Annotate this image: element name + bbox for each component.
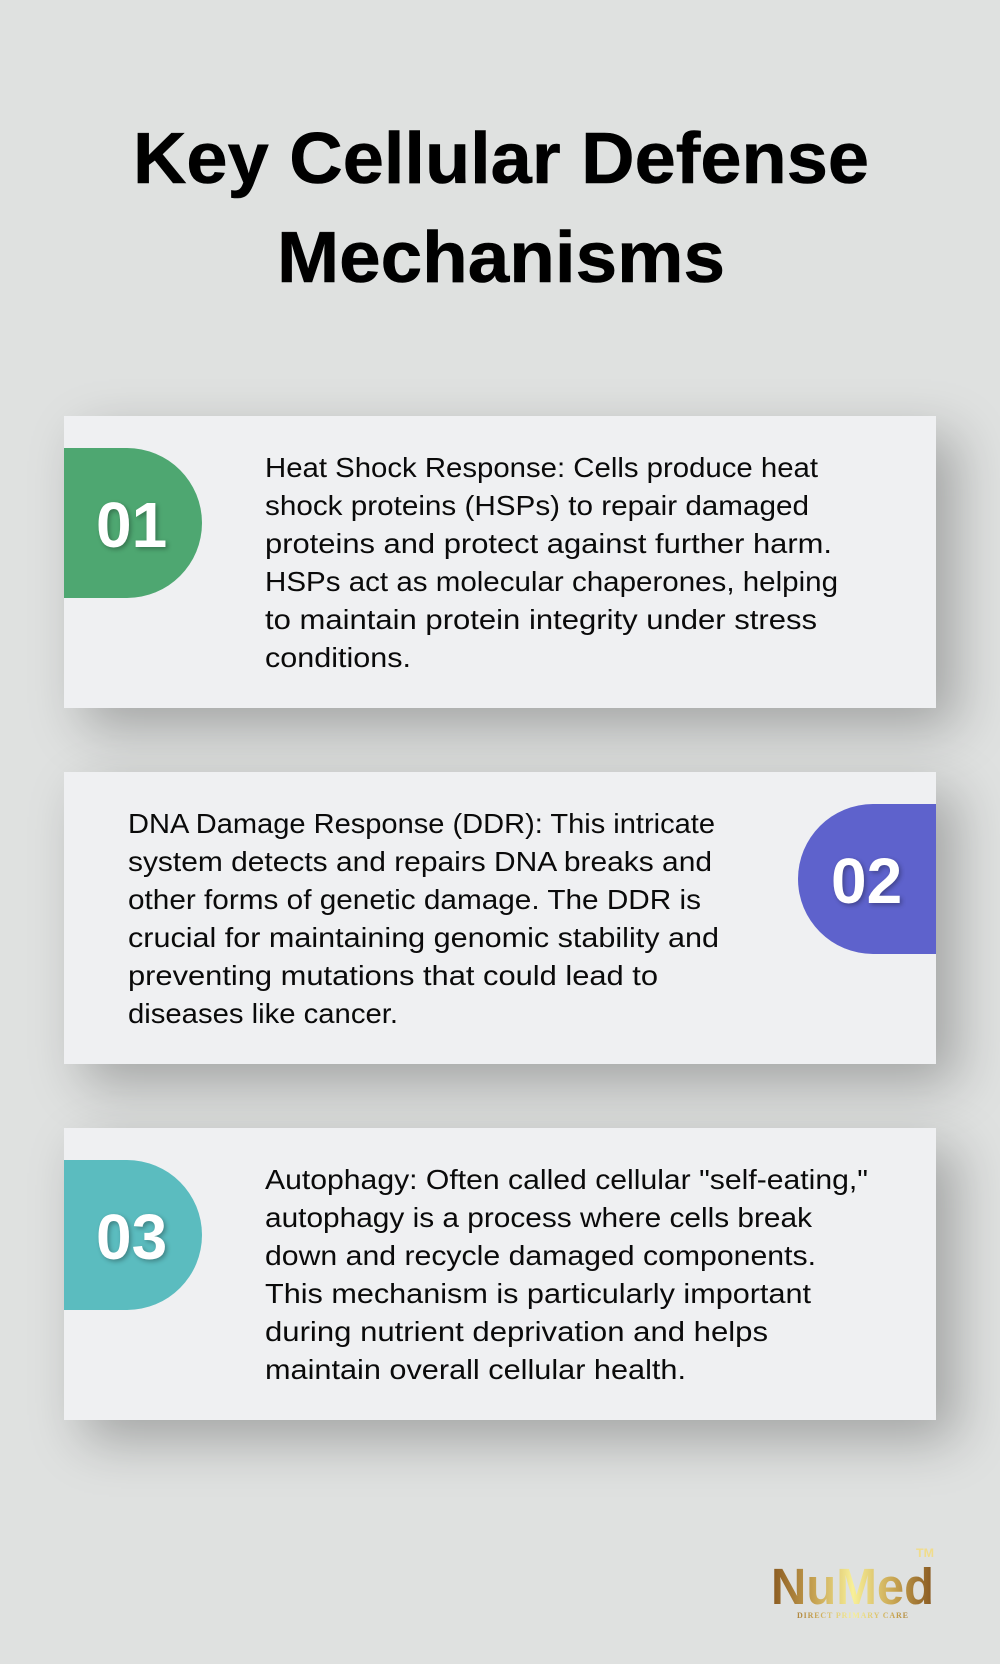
badge: 01	[64, 448, 202, 598]
badge: 03	[64, 1160, 202, 1310]
badge: 01: 01	[96, 489, 167, 561]
text: heat shock response: Heat Shock Response: Cells produce heat	[265, 452, 818, 483]
text: autophagy: Autophagy: Often called cellular "self-eating,"	[265, 1164, 868, 1195]
text: DNA damage response: crucial for maintaining genomic stability and	[128, 922, 719, 953]
text: autophagy: during nutrient deprivation and helps	[265, 1316, 768, 1347]
badge: 03: 03	[96, 1201, 167, 1273]
logo: NuMed: TM	[916, 1546, 934, 1560]
text: DNA damage response: other forms of genetic damage. The DDR is	[128, 884, 701, 915]
title	[133, 119, 869, 298]
text: heat shock response: shock proteins (HSPs) to repair damaged	[265, 490, 809, 521]
text: DNA damage response: DNA Damage Response (DDR): This intricate	[128, 808, 715, 839]
panel: heat shock response	[64, 416, 936, 708]
text: autophagy: This mechanism is particularly important	[265, 1278, 811, 1309]
title: Mechanisms	[277, 218, 725, 298]
panel: autophagy	[64, 1128, 936, 1420]
text: DNA damage response: preventing mutations that could lead to	[128, 960, 658, 991]
text: DNA damage response	[128, 808, 719, 1029]
text: heat shock response: proteins and protect against further harm.	[265, 528, 832, 559]
text: autophagy: maintain overall cellular health.	[265, 1354, 686, 1385]
text: autophagy	[265, 1164, 868, 1385]
badge: 02: 02	[831, 845, 902, 917]
text: autophagy: down and recycle damaged components.	[265, 1240, 816, 1271]
panel: DNA damage response	[64, 772, 936, 1064]
text: DNA damage response: system detects and repairs DNA breaks and	[128, 846, 712, 877]
text: DNA damage response: diseases like cancer.	[128, 998, 398, 1029]
logo: NuMed: DIRECT PRIMARY CARE	[797, 1611, 908, 1620]
badge: 02	[798, 804, 936, 954]
text: heat shock response	[265, 452, 838, 673]
text: autophagy: autophagy is a process where cells break	[265, 1202, 813, 1233]
text: heat shock response: HSPs act as molecular chaperones, helping	[265, 566, 838, 597]
text: heat shock response: conditions.	[265, 642, 411, 673]
title: Key Cellular Defense	[133, 119, 869, 199]
text: heat shock response: to maintain protein integrity under stress	[265, 604, 817, 635]
logo: NuMed: NuMed	[771, 1558, 934, 1615]
